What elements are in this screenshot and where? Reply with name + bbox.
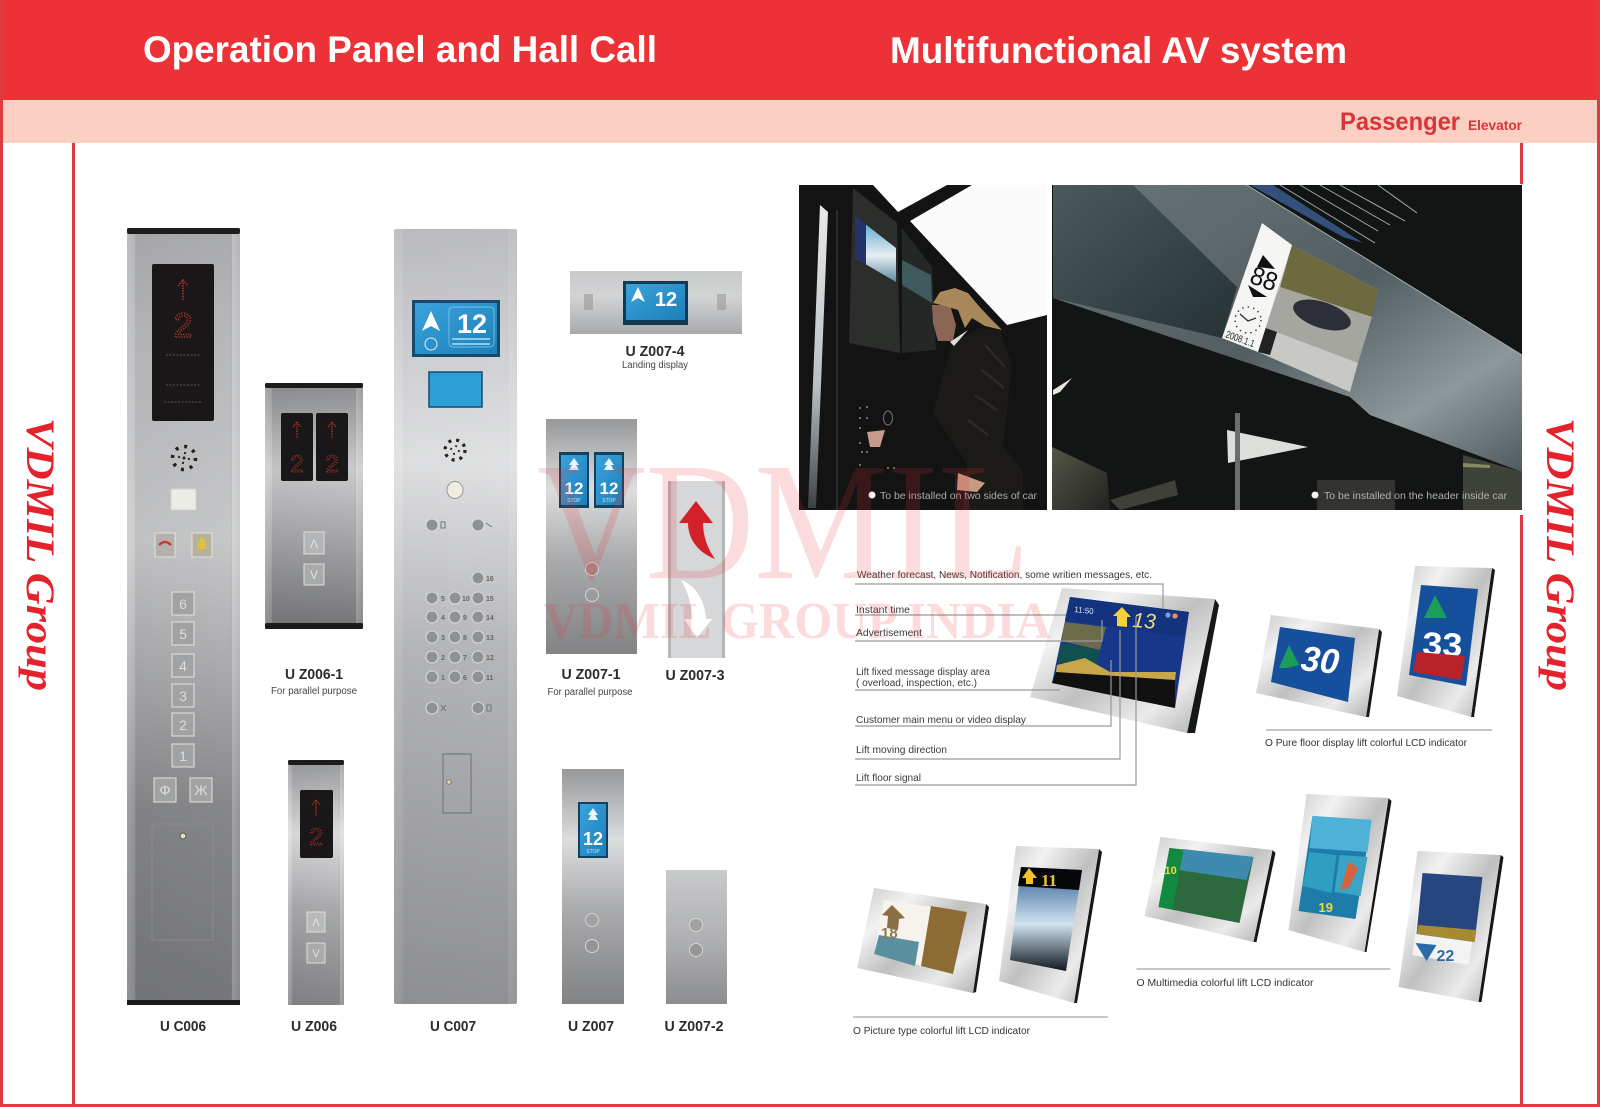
label: U Z006: U Z006 (291, 1019, 337, 1035)
panel: U Z007-1: STOP (567, 498, 581, 504)
panel: U Z007-1: STOP (602, 498, 616, 504)
screen with floor number: 2008.1.1 (1224, 329, 1256, 350)
icon: white down arrow (681, 580, 712, 638)
portrait monitor 33: 33 (1422, 625, 1463, 663)
landscape monitor 18 (857, 888, 989, 993)
speaker (445, 440, 465, 460)
panel: U C007 (394, 229, 517, 1004)
card reader (152, 824, 213, 940)
side label right: VDMIL Group: VDMIL Group (1538, 418, 1583, 691)
side label left: VDMIL Group: VDMIL Group (18, 418, 63, 691)
panel: U C007: 9 (463, 615, 467, 622)
panel: U Z007-1 (546, 419, 637, 654)
label: U Z007-4: U Z007-4 (626, 344, 684, 360)
panel: U Z006: Λ (312, 917, 320, 929)
panel: U C006: Φ (159, 782, 171, 798)
display (152, 264, 214, 421)
callout text: Lift fixed message display area (856, 666, 990, 678)
label: U Z007-4: Landing display (622, 360, 688, 371)
panel: U C007: 15 (486, 596, 494, 603)
watermark: VDMIL (537, 429, 1030, 615)
floor button grid (426, 519, 484, 714)
camera button (447, 482, 463, 498)
panel: U C007: 5 (441, 596, 445, 603)
portrait monitor 11: 11 (1041, 871, 1057, 890)
photo: header inside car (1052, 185, 1522, 510)
screen with floor number: 88 (1246, 260, 1282, 297)
panel: U C006: 5 (179, 626, 187, 642)
portrait monitor 11 (999, 846, 1102, 1003)
photo: header inside car: To be installed on the header inside car (1324, 490, 1507, 502)
panel: U C006: 4 (179, 658, 187, 674)
callout text: Instant time (856, 604, 910, 616)
portrait monitor 19: 19 (1318, 900, 1333, 915)
panel: U C007: 4 (441, 615, 445, 622)
label: U Z007-4 (622, 344, 688, 371)
label: U C007: U C007 (430, 1019, 476, 1035)
portrait monitor 33 (1397, 566, 1495, 717)
LCD display (412, 300, 500, 357)
label: U Z006-1: For parallel purpose (271, 686, 357, 697)
light (171, 489, 196, 510)
callout text: Lift floor signal (856, 772, 921, 784)
panel: U C007: 2 (441, 655, 445, 662)
panel: U C007: 11 (486, 675, 494, 682)
LCD display: 12 (457, 309, 487, 339)
panel: U C007: 10 (462, 596, 470, 603)
landscape monitor 30 (1256, 615, 1382, 717)
callout text: Customer main menu or video display (856, 714, 1027, 726)
callout text (856, 569, 1152, 784)
label: U Z007-3: U Z007-3 (666, 668, 724, 684)
caption: O Pure floor display lift colorful LCD indicator (1265, 737, 1467, 749)
panel: U C007: 13 (486, 635, 494, 642)
landscape monitor 30: 30 (1299, 639, 1342, 682)
landscape monitor 10 (1144, 837, 1276, 942)
photo: two sides of car (799, 185, 1047, 510)
label: U Z007-1: U Z007-1 (562, 667, 620, 683)
panel: U Z007-4 landing display: 12 (655, 289, 677, 311)
panel: U Z007-3 arrow lantern (668, 481, 725, 658)
callout leader lines (855, 584, 1163, 785)
landscape monitor 18: 18 (881, 925, 898, 942)
caption: O Multimedia colorful lift LCD indicator (1136, 977, 1314, 989)
panel: U C006: Ж (195, 782, 208, 798)
floor buttons (154, 592, 212, 802)
panel: U Z006 (288, 760, 344, 1005)
portrait monitor 22: 22 (1436, 948, 1454, 965)
panel: U C007: 7 (463, 655, 467, 662)
group: multimedia indicators (1136, 794, 1504, 1002)
card reader (443, 754, 471, 813)
caption: O Picture type colorful lift LCD indicator (853, 1025, 1030, 1037)
alarm buttons (155, 533, 212, 557)
icon: red up arrow (679, 501, 715, 559)
screen with floor number (1222, 223, 1378, 392)
panel: U C007: 8 (463, 635, 467, 642)
heading: Multifunctional AV system: Multifunctional AV system (890, 30, 1347, 71)
speaker (172, 446, 196, 470)
label: U Z007-2: U Z007-2 (664, 1019, 724, 1035)
panel: U C006 (127, 228, 240, 1005)
panel: U C007: 14 (486, 615, 494, 622)
portrait monitor 19 (1288, 794, 1392, 952)
sub band: Passenger Elevator (0, 100, 1600, 143)
label: U Z007-1: For parallel purpose (548, 687, 633, 698)
sub band: Passenger Elevator: Passenger (1340, 108, 1460, 136)
panel: U Z006-1: 2 (290, 451, 304, 478)
label: U Z007-1 (548, 667, 633, 698)
panel: U Z006-1: Λ (310, 537, 318, 551)
panel: U Z007-4 landing display (570, 271, 742, 334)
panel: U C006: 1 (179, 748, 187, 764)
callout text: Weather forecast, News, Notification, some writien messages, etc. (857, 569, 1152, 581)
monitor: 11:50 (1074, 605, 1095, 616)
panel: U C007: 16 (486, 576, 494, 583)
panel: U C006: 3 (179, 688, 187, 704)
panel: U C006: 6 (179, 596, 187, 612)
sub band: Passenger Elevator: Elevator (1468, 117, 1523, 133)
label: U Z006-1: U Z006-1 (285, 667, 343, 683)
heading: Operation Panel and Hall Call: Operation Panel and Hall Call (143, 29, 657, 70)
landscape monitor 10: 10 (1164, 865, 1177, 877)
watermark: VDMIL GROUP INDIA (543, 593, 1051, 650)
panel: U Z007-2 (666, 870, 727, 1004)
panel: U Z006-1: 2 (325, 451, 339, 478)
photo: two sides of car: To be installed on two sides of car (880, 490, 1037, 502)
panel: U C007: 1 (441, 675, 445, 682)
panel: U C007: 6 (463, 675, 467, 682)
label: U C006: U C006 (160, 1019, 206, 1035)
display: 2 (174, 307, 192, 345)
panel: U C006: 2 (179, 717, 187, 733)
panel: U C007: 3 (441, 635, 445, 642)
panel: U Z006-1: V (310, 568, 318, 582)
panel: U Z007: 12 (583, 829, 603, 849)
label: U Z007: U Z007 (568, 1019, 614, 1035)
small display (429, 372, 482, 407)
monitor (1030, 588, 1219, 733)
group: pure floor display indicators (1256, 566, 1495, 749)
panel: U Z007-1: 12 (600, 479, 618, 498)
portrait monitor 22 (1398, 851, 1504, 1002)
panel: U Z007 (562, 769, 624, 1004)
panel: U Z007: STOP (586, 849, 600, 855)
panel: U Z006: 2 (309, 824, 323, 851)
callout text: Lift moving direction (856, 744, 947, 756)
panel: U C007: 12 (486, 655, 494, 662)
callout text: Advertisement (856, 627, 922, 639)
monitor: 13 (1132, 609, 1157, 634)
panel: U Z007-1: 12 (565, 479, 583, 498)
label: U Z006-1 (271, 667, 357, 697)
callout text: ( overload, inspection, etc.) (856, 677, 977, 689)
header band (0, 0, 1600, 100)
panel: U Z006-1 (265, 383, 363, 629)
group: picture type indicators (853, 846, 1108, 1037)
diagram: monitor with callouts (855, 569, 1219, 785)
panel: U Z006: V (312, 948, 320, 960)
